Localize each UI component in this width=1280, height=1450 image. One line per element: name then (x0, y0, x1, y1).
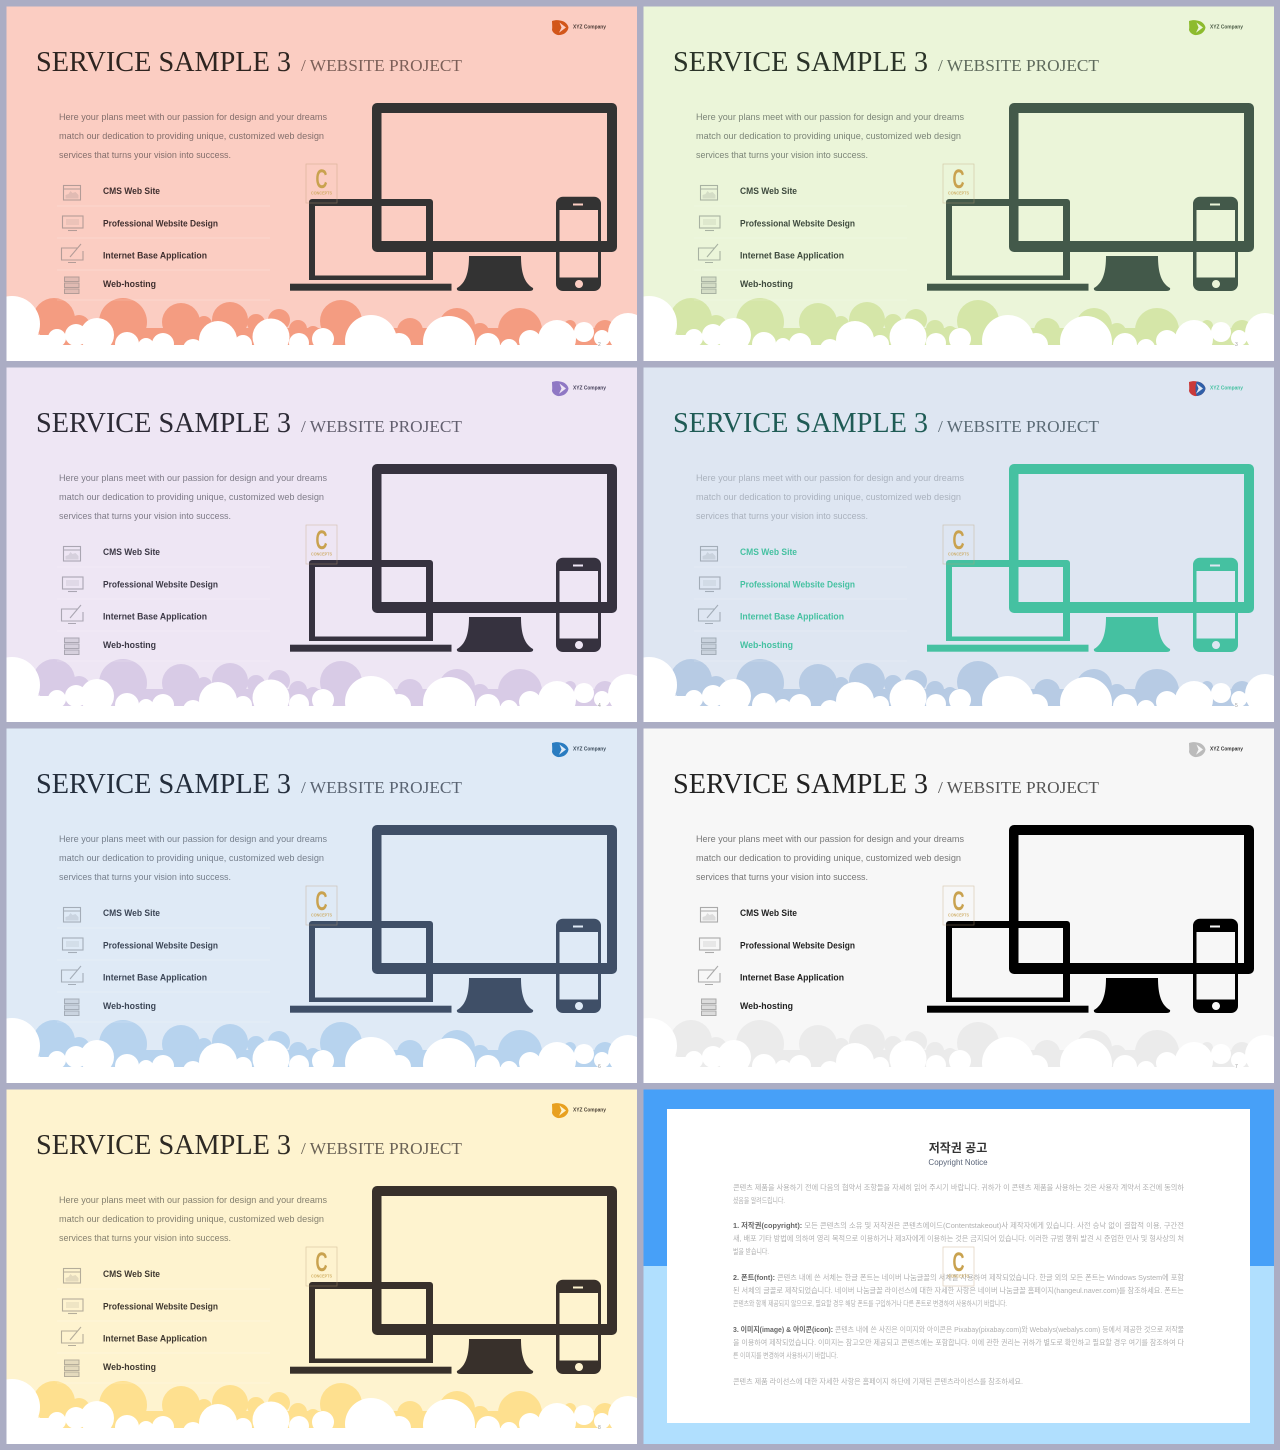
watermark badge: CONCEPTS (311, 552, 332, 556)
description: Here your plans meet with our passion for design and your dreams (59, 473, 327, 484)
service list (103, 547, 218, 650)
panel: slide 2 salmon (0, 6, 648, 368)
service list: CMS Web Site (103, 908, 160, 918)
logo (1189, 20, 1243, 35)
description (59, 473, 327, 522)
service list: Professional Website Design (103, 940, 218, 950)
page number: 2 (598, 342, 601, 348)
title: SERVICE SAMPLE 3 (36, 1130, 291, 1161)
description: services that turns your vision into success. (59, 150, 231, 161)
subtitle: / WEBSITE PROJECT (938, 56, 1100, 75)
logo (1189, 742, 1243, 757)
description: services that turns your vision into success. (696, 872, 868, 883)
description (59, 1195, 327, 1244)
watermark badge: C (952, 886, 964, 916)
service list (740, 547, 855, 650)
description: services that turns your vision into success. (59, 872, 231, 883)
service list: Internet Base Application (103, 250, 207, 260)
list icons (62, 908, 83, 1016)
watermark badge (943, 164, 974, 203)
service list: Internet Base Application (740, 612, 844, 622)
panel: slide 3 green (621, 6, 1280, 368)
watermark badge (943, 886, 974, 925)
notice subheading: Copyright Notice (928, 1158, 988, 1167)
logo (552, 1103, 606, 1118)
description: match our dedication to providing unique, customized web design (59, 131, 324, 142)
service list (740, 908, 855, 1011)
service list: Internet Base Application (103, 1334, 207, 1344)
subtitle: / WEBSITE PROJECT (938, 778, 1100, 797)
service list: Web-hosting (103, 1001, 156, 1011)
subtitle: / WEBSITE PROJECT (301, 56, 463, 75)
watermark badge (306, 1247, 337, 1286)
list icons (62, 186, 83, 294)
clouds (0, 1018, 648, 1090)
logo: XYZ Company (573, 386, 606, 392)
section 1 text (733, 1221, 1184, 1256)
subtitle: / WEBSITE PROJECT (938, 417, 1100, 436)
license line: 콘텐츠 제품 라이선스에 대한 자세한 사항은 홈페이지 하단에 기재된 콘텐츠라이선스를 참조하세요. (733, 1377, 1023, 1386)
section 2 text (733, 1273, 1184, 1308)
watermark badge: CONCEPTS (311, 190, 332, 196)
description: Here your plans meet with our passion for design and your dreams (696, 112, 964, 123)
service list: Web-hosting (103, 640, 156, 650)
service list: CMS Web Site (103, 186, 160, 196)
service list: CMS Web Site (740, 186, 797, 196)
devices (290, 825, 617, 1013)
watermark badge: C (952, 1247, 964, 1277)
description (696, 473, 964, 522)
description: match our dedication to providing unique, customized web design (59, 853, 324, 864)
intro text: 콘텐츠 제품을 사용하기 전에 다음의 협약서 조항들을 자세히 읽어 주시기 바랍니다. 귀하가 이 콘텐츠 제품을 사용하는 것은 사용자 계약서 조건에 동의하 (733, 1183, 1184, 1192)
title: SERVICE SAMPLE 3 (673, 47, 928, 78)
title: SERVICE SAMPLE 3 (36, 408, 291, 439)
logo (552, 381, 606, 396)
service list: Internet Base Application (740, 972, 844, 982)
description: services that turns your vision into success. (59, 511, 231, 522)
service list (103, 1269, 218, 1372)
clouds (0, 657, 648, 729)
service list: Web-hosting (740, 640, 793, 650)
logo: XYZ Company (1210, 386, 1243, 392)
devices (290, 103, 617, 291)
list icons (698, 186, 720, 294)
service list: Internet Base Application (740, 250, 844, 260)
description: Here your plans meet with our passion for design and your dreams (696, 834, 964, 845)
notice heading: 저작권 공고 (929, 1140, 987, 1155)
panel: copyright notice (644, 1090, 1274, 1444)
logo: XYZ Company (1210, 24, 1243, 30)
section 2 text: 된 서체의 글꼴로 제작되었습니다. 네이버 나눔글꼴 라이선스에 대한 자세한 사항은 네이버 나눔글꼴 홈페이지(hangeul.naver.com)를 참조하세요. 폰트는 (733, 1286, 1184, 1295)
clouds (621, 296, 1280, 368)
service list: Professional Website Design (103, 580, 218, 590)
description: match our dedication to providing unique, customized web design (59, 492, 324, 503)
section 1 text: 1. 저작권(copyright): 모든 콘텐츠의 소유 및 저작권은 콘텐츠에이드(Contentstakeout)사 제작자에게 있습니다. 사전 승낙 없이 결합적 이용, 구간전 (733, 1221, 1184, 1230)
panel: slide 5 teal on blue-grey (621, 368, 1280, 729)
description: match our dedication to providing unique, customized web design (696, 492, 961, 503)
logo: XYZ Company (573, 24, 606, 30)
service list: Web-hosting (740, 1001, 793, 1011)
description: services that turns your vision into success. (696, 511, 868, 522)
watermark badge: CONCEPTS (311, 1274, 332, 1278)
description (696, 112, 964, 161)
watermark badge (943, 525, 974, 564)
service list: CMS Web Site (103, 547, 160, 557)
description: Here your plans meet with our passion for design and your dreams (59, 1195, 327, 1206)
watermark badge (306, 525, 337, 564)
service list: Professional Website Design (740, 218, 855, 228)
service list: CMS Web Site (740, 547, 797, 557)
logo: XYZ Company (573, 746, 606, 752)
description: Here your plans meet with our passion for design and your dreams (59, 834, 327, 845)
clouds (0, 1379, 648, 1450)
intro text: 셨음을 알려드립니다. (733, 1196, 785, 1205)
devices (290, 1186, 617, 1374)
panel: slide 8 yellow (0, 1090, 648, 1450)
intro text (733, 1183, 1184, 1205)
section 3 text (733, 1325, 1184, 1360)
watermark badge: C (952, 164, 964, 194)
section 2 text: 2. 폰트(font): 콘텐츠 내에 쓴 서체는 한글 폰트는 네이버 나눔글꼴의 서체를 사용하여 제작되었습니다. 한글 외의 모든 폰트는 Windows System에 포함 (733, 1273, 1184, 1282)
service list (103, 908, 218, 1011)
watermark badge (943, 1247, 974, 1286)
watermark badge: C (316, 886, 328, 916)
logo (1189, 381, 1243, 396)
section 3 text: 른 이미지를 변경하여 사용하시기 바랍니다. (733, 1351, 838, 1360)
description (59, 112, 327, 161)
list icons (62, 1268, 83, 1376)
service list: Professional Website Design (103, 1302, 218, 1312)
service list: Internet Base Application (103, 972, 207, 982)
subtitle: / WEBSITE PROJECT (301, 417, 463, 436)
description: Here your plans meet with our passion for design and your dreams (59, 112, 327, 123)
watermark badge: CONCEPTS (948, 912, 969, 918)
service list: Professional Website Design (740, 940, 855, 950)
watermark badge: CONCEPTS (311, 912, 332, 918)
watermark badge (306, 164, 337, 203)
clouds (621, 1018, 1280, 1090)
description: match our dedication to providing unique, customized web design (59, 1214, 324, 1225)
clouds (621, 657, 1280, 729)
watermark badge: C (316, 1247, 328, 1277)
service list: Web-hosting (103, 279, 156, 289)
section 1 text: 벌을 받습니다. (733, 1247, 769, 1256)
watermark badge (306, 886, 337, 925)
panel: slide 4 lavender (0, 368, 648, 729)
panel: slide 6 sky blue (0, 728, 648, 1090)
service list: Internet Base Application (103, 612, 207, 622)
description (696, 834, 964, 883)
devices (290, 464, 617, 652)
title: SERVICE SAMPLE 3 (673, 408, 928, 439)
service list: Web-hosting (103, 1362, 156, 1372)
watermark badge: C (952, 525, 964, 555)
description: Here your plans meet with our passion for design and your dreams (696, 473, 964, 484)
section 3 text: 3. 이미지(image) & 아이콘(icon): 콘텐츠 내에 쓴 사진은 이미지와 아이콘은 Pixabay(pixabay.com)와 Webalys(webalys.com) 등에서 제공한 것으로 저작물 (733, 1325, 1184, 1334)
section 3 text: 을 이용하여 제작되었습니다. 이미지는 참고오만 제공되고 콘텐츠에는 포함합니다. 이에 관한 권리는 귀하가 별도로 확인하고 필요할 경우 여기를 참조하여 다 (733, 1338, 1184, 1347)
logo (552, 742, 606, 757)
logo (552, 20, 606, 35)
panel: slide 7 white-grey (621, 728, 1280, 1090)
clouds (0, 296, 648, 368)
description: match our dedication to providing unique, customized web design (696, 131, 961, 142)
list icons (698, 908, 720, 1016)
title: SERVICE SAMPLE 3 (36, 769, 291, 800)
subtitle: / WEBSITE PROJECT (301, 1139, 463, 1158)
subtitle: / WEBSITE PROJECT (301, 778, 463, 797)
page number: 5 (1235, 703, 1238, 709)
logo: XYZ Company (1210, 746, 1243, 752)
devices (927, 103, 1254, 291)
title: SERVICE SAMPLE 3 (36, 47, 291, 78)
watermark badge: CONCEPTS (948, 552, 969, 556)
description: services that turns your vision into success. (59, 1233, 231, 1244)
list icons (62, 546, 83, 654)
service list: CMS Web Site (740, 908, 797, 918)
description: match our dedication to providing unique, customized web design (696, 853, 961, 864)
watermark badge: CONCEPTS (948, 190, 969, 196)
service list: Web-hosting (740, 279, 793, 289)
service list: CMS Web Site (103, 1269, 160, 1279)
description (59, 834, 327, 883)
title: SERVICE SAMPLE 3 (673, 769, 928, 800)
logo: XYZ Company (573, 1108, 606, 1114)
devices (927, 825, 1254, 1013)
watermark badge: CONCEPTS (948, 1274, 969, 1278)
section 1 text: 새, 배포 기타 방법에 의하여 영리 목적으로 이용하거나 제3자에게 이용하는 것은 금지되어 있습니다. 이러한 규범 행위 발견 시 준엄한 민사 및 형사상의 처 (733, 1234, 1184, 1243)
watermark badge: C (316, 164, 328, 194)
page number: 3 (1235, 342, 1238, 348)
page number: 7 (1235, 1064, 1238, 1070)
service list: Professional Website Design (103, 218, 218, 228)
page number: 4 (598, 703, 601, 709)
service list (103, 186, 218, 289)
section 2 text: 콘텐츠와 함께 제공되지 않으므로, 필요할 경우 해당 폰트를 구입하거나 다른 폰트로 변경하여 사용하시기 바랍니다. (733, 1299, 1007, 1308)
list icons (698, 546, 720, 654)
page number: 8 (598, 1425, 601, 1431)
service list: Professional Website Design (740, 580, 855, 590)
devices (927, 464, 1254, 652)
page number: 6 (598, 1064, 601, 1070)
service list (740, 186, 855, 289)
watermark badge: C (316, 525, 328, 555)
description: services that turns your vision into success. (696, 150, 868, 161)
